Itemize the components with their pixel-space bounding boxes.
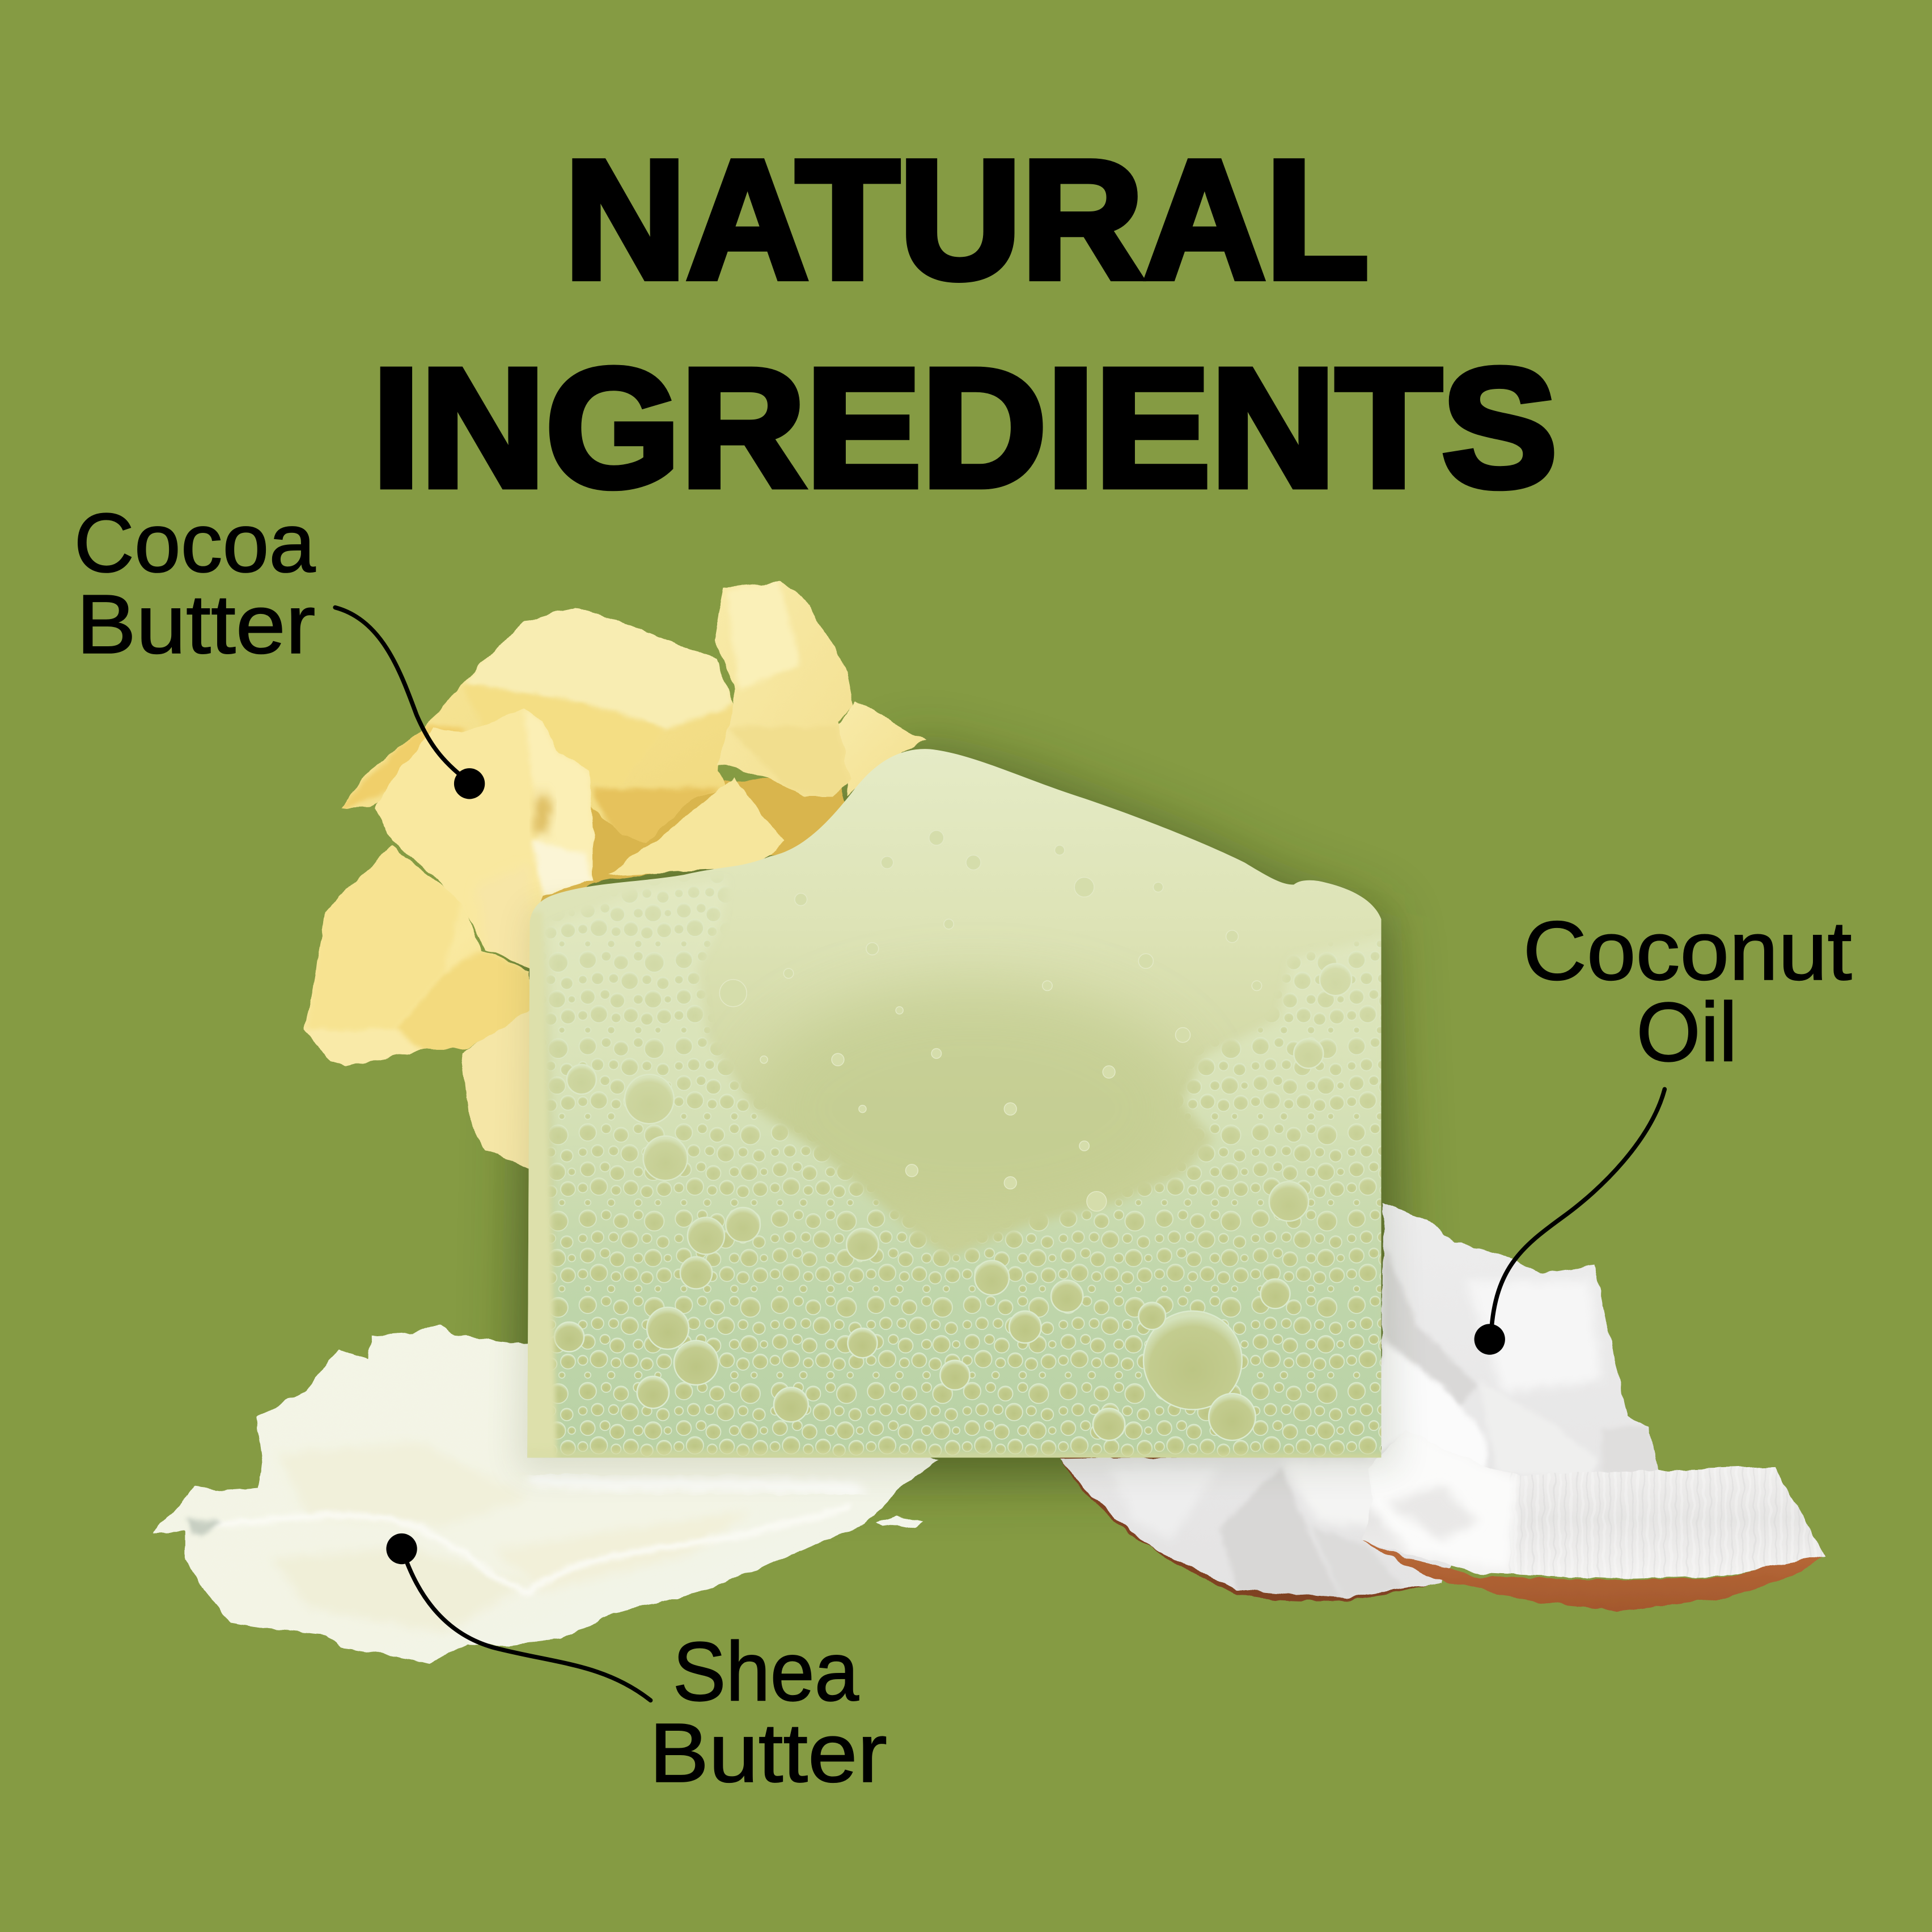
soap smooth centre <box>752 986 1195 1232</box>
coconut front piece <box>1355 1423 1830 1611</box>
ingredient: coconut pieces <box>1053 1201 1830 1611</box>
callout: cocoa butter <box>74 496 485 799</box>
title <box>372 125 1557 522</box>
chunk: under soap <box>462 1008 532 1171</box>
callout: cocoa butter: Butter <box>77 578 315 671</box>
chunk: back top <box>333 601 739 850</box>
title: NATURAL <box>564 125 1369 314</box>
chunk: lower left <box>302 844 537 1072</box>
title: INGREDIENTS <box>372 333 1557 522</box>
chunk: right small <box>838 701 925 796</box>
callout: cocoa butter: Cocoa <box>74 496 316 590</box>
callout: coconut oil: Coconut <box>1523 904 1852 998</box>
chunk: top right <box>715 581 853 797</box>
chunk: front with dot <box>370 702 604 973</box>
scattered small bubbles <box>719 831 1262 1211</box>
ingredient: shea butter smear <box>148 1319 949 1670</box>
callout: shea butter: Shea <box>673 1625 859 1718</box>
soap soft shadow over ingredients <box>518 909 1399 1472</box>
shea fleck <box>876 1515 923 1528</box>
soap bar with foam <box>518 749 1405 1466</box>
callout: coconut oil <box>1475 904 1852 1355</box>
callout: shea butter <box>386 1533 887 1800</box>
coconut back piece <box>1053 1201 1663 1602</box>
callout: shea butter: Butter <box>649 1706 887 1800</box>
soap edge strip <box>523 912 557 1466</box>
chunk: wedge <box>608 777 783 875</box>
callout: coconut oil: Oil <box>1636 985 1738 1079</box>
soap shadow on background <box>518 748 1405 1478</box>
ingredient: cocoa butter chunks <box>302 579 925 1171</box>
foam area <box>518 862 1405 1466</box>
